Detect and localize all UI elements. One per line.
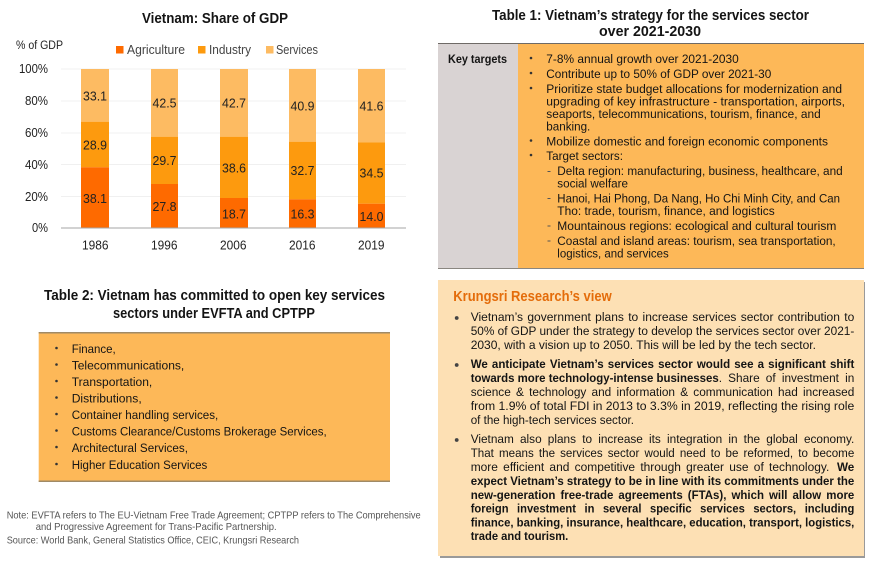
y axis labels: 80% — [25, 94, 48, 108]
key targets list: seaports, telecommunications, tourism, finance, and — [546, 107, 821, 121]
bar 2006: 38.6 — [222, 162, 246, 176]
bullet 2: We anticipate Vietnam’s services sector would see a significant shift — [471, 357, 854, 371]
bar 2019: 14.0 — [360, 210, 384, 224]
bar 1996: 29.7 — [152, 154, 177, 168]
footnote: note and source: and Progressive Agreement for Trans-Pacific Partnership. — [36, 522, 277, 533]
bullet 3: new-generation free-trade agreements (FTAs), which will allow more — [471, 488, 854, 502]
key targets list: logistics, and services — [557, 246, 669, 260]
y axis unit label: % of GDP — [16, 40, 63, 52]
bar 2016 — [289, 69, 316, 228]
panel: table 2 services list: Finance, — [72, 342, 116, 356]
chart: Vietnam share of GDP stacked bars — [16, 11, 406, 252]
bar 2016: 40.9 — [290, 100, 315, 114]
panel: table 2 services list: Higher Education Services — [72, 458, 207, 472]
bullet 3: expect Vietnam’s strategy to be in line with its commitments under the — [471, 474, 854, 488]
legend — [116, 43, 318, 57]
table 2 heading — [44, 288, 385, 322]
key targets list: Tho: trade, tourism, finance, and logistics — [557, 204, 775, 218]
panel: table 2 services list: Telecommunications, — [72, 358, 184, 372]
key targets list: upgrading of key infrastructure - transportation, airports, — [546, 94, 845, 108]
y axis labels: 0% — [32, 221, 48, 235]
key targets list: Contribute up to 50% of GDP over 2021-30 — [546, 67, 771, 81]
bullet 2: of the high-tech services sector. — [471, 413, 634, 427]
panel: table 2 services list: Transportation, — [72, 375, 152, 389]
panel: table 1 key targets — [438, 43, 864, 269]
panel heading: Krungsri Research’s view — [453, 289, 612, 305]
bullet 3: Vietnam also plans to increase its integration in the global economy. — [471, 432, 854, 446]
y axis labels: 100% — [19, 62, 48, 76]
bar 2006 — [220, 69, 248, 228]
table 1 heading: Table 1: Vietnam’s strategy for the services sector — [492, 8, 809, 24]
footnote: note and source: Source: World Bank, General Statistics Office, CEIC, Krungsri Research — [7, 536, 299, 546]
bullet 2: science & technology and information & communication had increased — [471, 385, 854, 399]
bullet 1: Vietnam’s government plans to increase services sector contribution to — [471, 310, 854, 324]
key targets list: Prioritize state budget allocations for modernization and — [546, 82, 842, 96]
bar 1986: 38.1 — [83, 192, 107, 206]
x axis years: 1996 — [151, 238, 178, 252]
table 1 heading — [492, 8, 809, 40]
bar 1986: 33.1 — [83, 90, 107, 104]
bullet 1 — [455, 310, 854, 352]
bullet 1: 50% of GDP under the strategy to develop the services sector over 2021- — [471, 324, 854, 338]
bullet 3: trade and tourism. — [471, 529, 568, 543]
x axis years: 2019 — [358, 238, 385, 252]
bar 2016: 16.3 — [290, 208, 315, 222]
bar 1986 — [81, 69, 109, 228]
key targets list: social welfare — [557, 176, 628, 190]
key targets list: Mountainous regions: ecological and cultural tourism — [557, 219, 836, 233]
key targets list — [530, 52, 845, 260]
y axis labels: 60% — [25, 126, 48, 140]
table 1 heading: over 2021-2030 — [599, 24, 701, 40]
y axis labels: 40% — [25, 158, 48, 172]
bullet 2: from 1.9% of total FDI in 2013 to 3.3% in 2019, reflecting the rising role — [471, 399, 854, 413]
bar 2019: 41.6 — [360, 100, 384, 114]
panel: table 2 services list — [39, 332, 390, 482]
bar 2006: 42.7 — [222, 96, 246, 110]
chart title: Vietnam: Share of GDP — [142, 11, 288, 27]
key targets list: Delta region: manufacturing, business, healthcare, and — [557, 164, 843, 178]
bullet 3: We — [837, 460, 854, 474]
bar 2019 — [358, 69, 385, 228]
x axis years — [82, 238, 385, 252]
bar 2016: 32.7 — [290, 164, 315, 178]
bar 2019: 34.5 — [360, 166, 384, 180]
bullet 2: towards more technology-intense businesses — [471, 371, 719, 385]
table 2 heading: sectors under EVFTA and CPTPP — [113, 306, 315, 322]
row label: Key targets — [448, 52, 507, 66]
key targets list: 7-8% annual growth over 2021-2030 — [546, 52, 739, 66]
x axis years: 2016 — [289, 238, 316, 252]
key targets list: Target sectors: — [546, 149, 623, 163]
key targets list: Hanoi, Hai Phong, Da Nang, Ho Chi Minh City, and Can — [557, 192, 840, 206]
panel: table 2 services list: Customs Clearance/Customs Brokerage Services, — [72, 424, 327, 438]
bullet 3: more efficient and competitive through greater use of technology. — [471, 460, 829, 474]
bullet 2 — [455, 357, 854, 427]
bullet 2: . Share of investment in — [719, 371, 854, 385]
bullet 3: That means the services sector would need to be reformed, to become — [471, 446, 854, 460]
panel: Krungsri Research's view — [438, 280, 865, 558]
bar 1996: 42.5 — [152, 96, 177, 110]
panel: table 2 services list: Architectural Services, — [72, 441, 188, 455]
table 2 heading: Table 2: Vietnam has committed to open key services — [44, 288, 385, 304]
y axis labels — [19, 62, 48, 235]
key targets list: banking. — [546, 120, 590, 134]
bar 1986: 28.9 — [83, 138, 107, 152]
legend: Services — [276, 43, 318, 57]
legend: Industry — [209, 43, 252, 57]
bar 1996: 27.8 — [152, 200, 177, 214]
key targets list: Mobilize domestic and foreign economic components — [546, 134, 828, 148]
panel: table 2 services list: Container handling services, — [72, 408, 218, 422]
bullet 1: 2030, with a vision up to 2050. This will be led by the tech sector. — [471, 338, 816, 352]
x axis years: 1986 — [82, 238, 109, 252]
bar 2006: 18.7 — [222, 208, 246, 222]
y axis labels: 20% — [25, 190, 48, 204]
footnote: note and source — [7, 510, 421, 546]
x axis years: 2006 — [220, 238, 247, 252]
legend: Agriculture — [127, 43, 185, 57]
footnote: note and source: Note: EVFTA refers to The EU-Vietnam Free Trade Agreement; CPTPP refers to The Comprehensive — [7, 510, 421, 522]
panel: table 2 services list: Distributions, — [72, 392, 142, 406]
bullet 3 — [455, 432, 854, 543]
bar 1996 — [151, 69, 178, 228]
key targets list: Coastal and island areas: tourism, sea transportation, — [557, 234, 836, 248]
